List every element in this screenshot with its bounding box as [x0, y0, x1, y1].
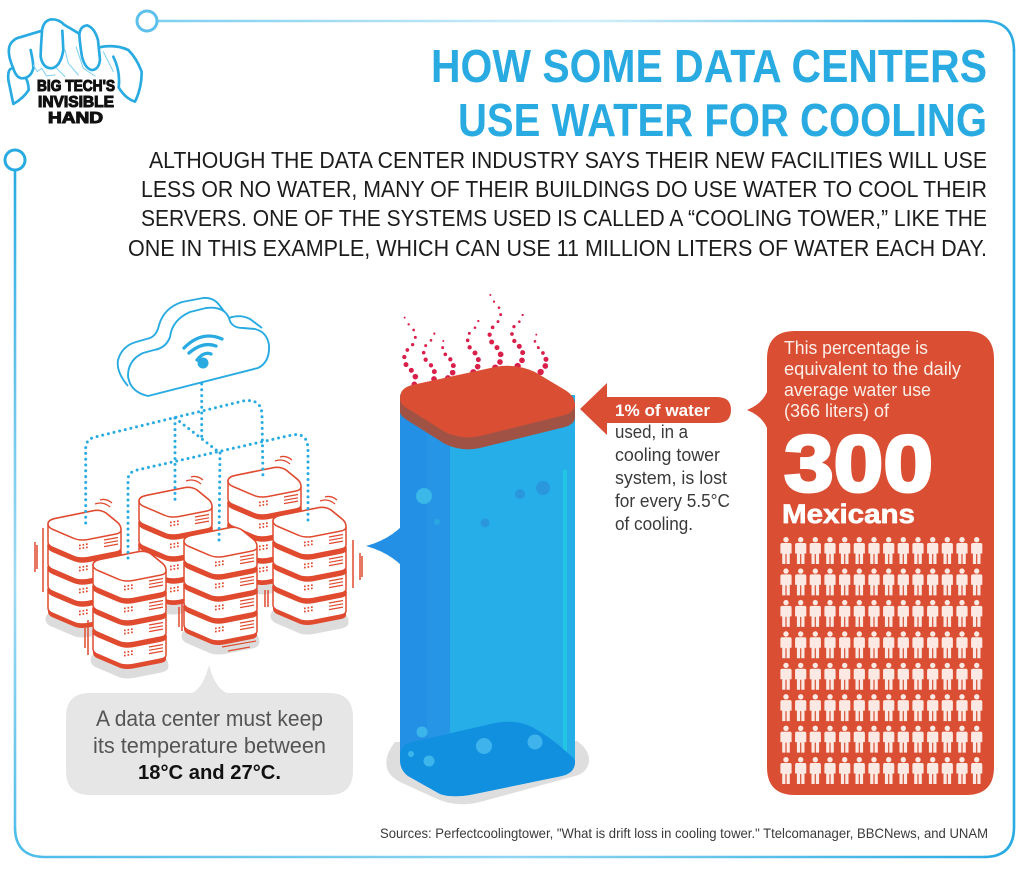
people grid [780, 537, 982, 784]
tower cap side [400, 398, 575, 449]
label Mexicans: Mexicans [782, 499, 915, 529]
panel text: This percentage is [784, 337, 928, 358]
tower cap top [400, 366, 575, 437]
panel background [747, 331, 994, 795]
arrow: 1% of water: 1% of water [615, 402, 711, 420]
tower shadow [386, 741, 589, 804]
panel text [784, 337, 962, 421]
title [431, 40, 987, 146]
logo: Big Tech's Invisible Hand [8, 19, 142, 127]
cooling tower [366, 294, 589, 805]
text: water loss: used, in a [615, 422, 689, 442]
server stack back middle [139, 487, 212, 612]
number 300: 300 [784, 419, 933, 508]
panel: 300 Mexicans [747, 331, 994, 795]
network dotted lines [86, 384, 308, 558]
panel text: equivalent to the daily [784, 358, 962, 379]
server stack back right [228, 467, 301, 592]
text: water loss [615, 422, 730, 534]
server stack right [273, 507, 346, 632]
callout: temperature: 18°C and 27°C. [138, 762, 281, 784]
server stacks [35, 456, 362, 676]
server stack left [48, 510, 121, 635]
callout: temperature [66, 665, 353, 795]
panel text: (366 liters) of [784, 400, 890, 421]
vibration marks [35, 456, 362, 655]
tower body [400, 395, 575, 805]
text: water loss: for every 5.5°C [615, 491, 730, 511]
text: water loss: cooling tower [615, 445, 720, 465]
text: water loss: system, is lost [615, 468, 727, 488]
icon: wifi cloud [118, 298, 269, 396]
water pool [400, 722, 575, 796]
callout: temperature: A data center must keep [96, 706, 323, 731]
speech pointer to servers [366, 526, 402, 566]
intro text [128, 147, 987, 261]
logo: Big Tech's Invisible Hand: INVISIBLE [38, 94, 114, 111]
logo: Big Tech's Invisible Hand: HAND [48, 110, 103, 127]
steam dots [403, 294, 548, 393]
text: water loss: of cooling. [615, 514, 693, 534]
server stack front left [93, 551, 166, 676]
panel text: average water use [784, 379, 931, 400]
server stack front middle [184, 527, 257, 652]
callout: temperature: its temperature between [93, 733, 326, 758]
sources: Sources: Perfectcoolingtower, "What is drift loss in cooling tower." Ttelcomanager, BBCNews, and UNAM [380, 825, 988, 841]
arrow: 1% of water [580, 383, 731, 435]
logo: Big Tech's Invisible Hand: BIG TECH'S [37, 78, 115, 95]
